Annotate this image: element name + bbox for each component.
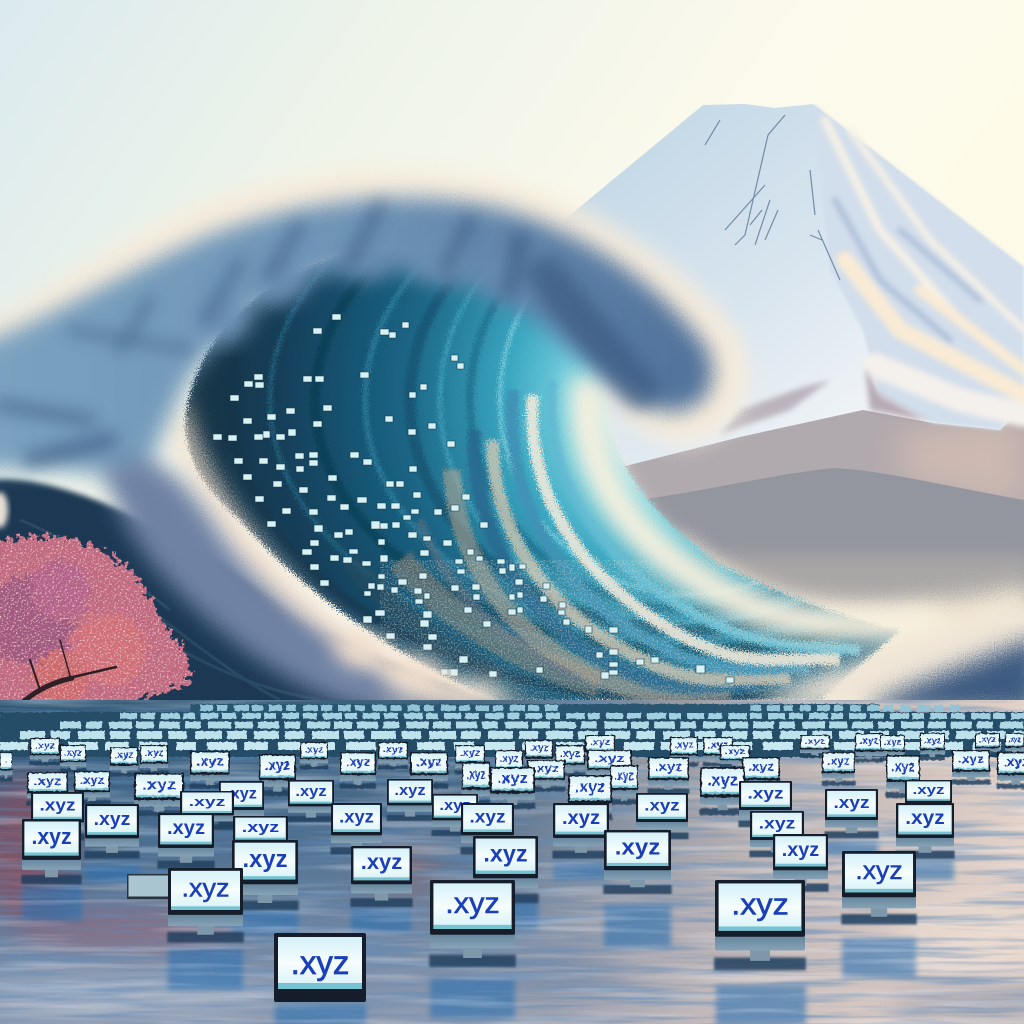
- billowing foam at foot of curl: [336, 634, 505, 704]
- rock shadows: [720, 380, 830, 434]
- blue-grey underside of lower curl: [105, 460, 435, 706]
- back monitors: .xyz: [707, 771, 738, 789]
- monitor: .xyz: [182, 873, 229, 902]
- middle monitors: .xyz: [295, 784, 327, 800]
- back monitors: .xyz: [265, 757, 290, 773]
- back monitors: .xyz: [859, 736, 879, 747]
- wave crest cloud: [0, 170, 748, 708]
- monitor: [603, 830, 672, 894]
- monitor without stand: .xyz: [291, 944, 349, 981]
- back monitors: .xyz: [383, 745, 403, 755]
- middle monitors: [30, 779, 955, 869]
- middle monitors: .xyz: [39, 796, 76, 814]
- middle monitors: .xyz: [833, 793, 870, 812]
- monitor: .xyz: [445, 888, 500, 920]
- back monitors: .xyz: [614, 768, 634, 784]
- back monitors: .xyz: [924, 735, 941, 745]
- back monitors: .xyz: [590, 738, 610, 748]
- middle monitors: .xyz: [905, 808, 945, 829]
- monitor: .xyz: [855, 858, 903, 885]
- mountain: [540, 104, 1024, 640]
- sand speckle on lower bands: [380, 560, 840, 710]
- monitor: .xyz: [243, 846, 287, 873]
- back monitors: .: [5, 754, 7, 766]
- middle monitors: .xyz: [394, 783, 426, 799]
- monitor: .xyz: [782, 839, 819, 861]
- crest lobes along inner edge: [201, 242, 543, 342]
- haze band running right of the wave: [600, 535, 1024, 705]
- back monitors: .xyz: [575, 779, 605, 796]
- back monitors: .xyz: [304, 745, 324, 755]
- dark crevasses: [705, 115, 840, 280]
- foliage: [0, 536, 191, 718]
- back monitors: .xyz: [80, 773, 104, 787]
- ripples: [0, 700, 1024, 1024]
- monitor: [21, 819, 82, 884]
- monitor: [841, 851, 917, 924]
- middle monitors: .xyz: [339, 807, 374, 827]
- middle monitors: .xyz: [759, 814, 796, 832]
- back monitors: .xyz: [958, 752, 984, 766]
- far rows of monitors: [0, 704, 1024, 757]
- back monitors: .xyz: [466, 765, 486, 782]
- back monitors: .xyz: [144, 748, 164, 759]
- crest blue body: [0, 198, 713, 490]
- back monitors: .xyz: [64, 747, 82, 757]
- back monitors: .xyz: [416, 755, 442, 769]
- middle monitors: .xyz: [439, 798, 471, 814]
- middle monitors: .xyz: [167, 818, 205, 839]
- back monitors: .xyz: [655, 760, 683, 774]
- dark hillside behind wave: [0, 479, 540, 712]
- monitor: [167, 868, 244, 943]
- small cloud puff at left edge: [0, 492, 8, 528]
- right lit face: [813, 104, 1024, 430]
- monitor: [429, 880, 516, 967]
- wave interior with concentric bands: [182, 250, 942, 700]
- back monitors: .xyz: [884, 737, 902, 747]
- monitor: .xyz: [731, 886, 789, 921]
- middle monitors: .xyz: [644, 796, 680, 814]
- monitors: [0, 733, 1024, 1002]
- back monitors: .xyz: [142, 777, 176, 793]
- monitor: .xyz: [361, 851, 402, 874]
- back monitors: .xyz: [560, 748, 581, 760]
- snow cap: [540, 104, 1024, 470]
- dark bank: [870, 635, 1024, 712]
- trunk and branches: [6, 640, 116, 716]
- cream bank: [760, 598, 1024, 706]
- back monitors: .xyz: [499, 754, 519, 765]
- warm and dark reflections: [0, 775, 1024, 1015]
- back monitors: .xyz: [748, 760, 774, 774]
- water base: [0, 700, 1024, 1024]
- back monitors: .xyz: [827, 755, 850, 768]
- monitor: [714, 880, 806, 970]
- main cream band: [587, 378, 940, 625]
- back monitors: .xyz: [460, 748, 480, 759]
- middle monitors: .xyz: [242, 819, 280, 835]
- cherry blossom tree: [0, 536, 191, 718]
- sweeping cream and blue bands: [474, 380, 860, 687]
- middle monitors: .xyz: [913, 784, 944, 797]
- back monitors: .xyz: [196, 754, 224, 768]
- interior colour: [185, 248, 900, 702]
- monitor: [350, 846, 413, 907]
- back monitors: .xyz: [674, 740, 694, 751]
- concentric water bands: [222, 259, 899, 700]
- cream halo of crest: [0, 170, 748, 443]
- back monitors: .xyz: [979, 735, 996, 744]
- monitor: .xyz: [31, 823, 72, 849]
- cloud bank at right: [760, 598, 1024, 712]
- back monitors: .xyz: [529, 743, 549, 754]
- back monitors: .xyz: [497, 771, 528, 787]
- back monitors: .xyz: [35, 741, 55, 751]
- cream lower curl: [170, 395, 545, 708]
- back monitors: .xyz: [346, 754, 370, 769]
- monitor: [231, 840, 299, 910]
- back monitors: .xyz: [114, 750, 134, 761]
- monitor: .xyz: [615, 834, 660, 859]
- dark foothill: [640, 468, 1024, 600]
- front monitors: [21, 819, 917, 1002]
- middle monitors: .xyz: [469, 806, 506, 826]
- middle monitors: .xyz: [189, 794, 225, 809]
- hillside streaks: [20, 520, 320, 700]
- monitor: .xyz: [483, 841, 528, 867]
- back monitors: .xyz: [34, 774, 62, 787]
- back monitors: .xyz: [725, 747, 745, 757]
- back monitors: .xyz: [891, 758, 915, 775]
- monitor without stand: [274, 933, 366, 1002]
- middle monitors: .xyz: [94, 809, 130, 830]
- back monitors: .xyz: [533, 762, 559, 775]
- back monitors: .xyz: [1008, 734, 1021, 744]
- monitor: [472, 836, 539, 903]
- water: [0, 700, 1024, 1024]
- monitor reflections: [22, 840, 954, 1024]
- pale monitor: [127, 874, 171, 899]
- middle monitors: .xyz: [562, 808, 600, 829]
- lower slopes: [600, 400, 1024, 640]
- monitor: [772, 834, 829, 892]
- tiny falling monitors: [213, 314, 734, 683]
- middle monitors: .xyz: [747, 784, 784, 802]
- lit bands on right face: [825, 120, 1024, 415]
- dark streaks in crest: [0, 205, 640, 460]
- back monitors: [0, 733, 1024, 820]
- back monitors: .xyz: [708, 740, 728, 751]
- middle monitors: .xyz: [226, 785, 257, 803]
- back monitors: .xyz: [594, 753, 625, 764]
- back monitors: .xyz: [805, 737, 826, 746]
